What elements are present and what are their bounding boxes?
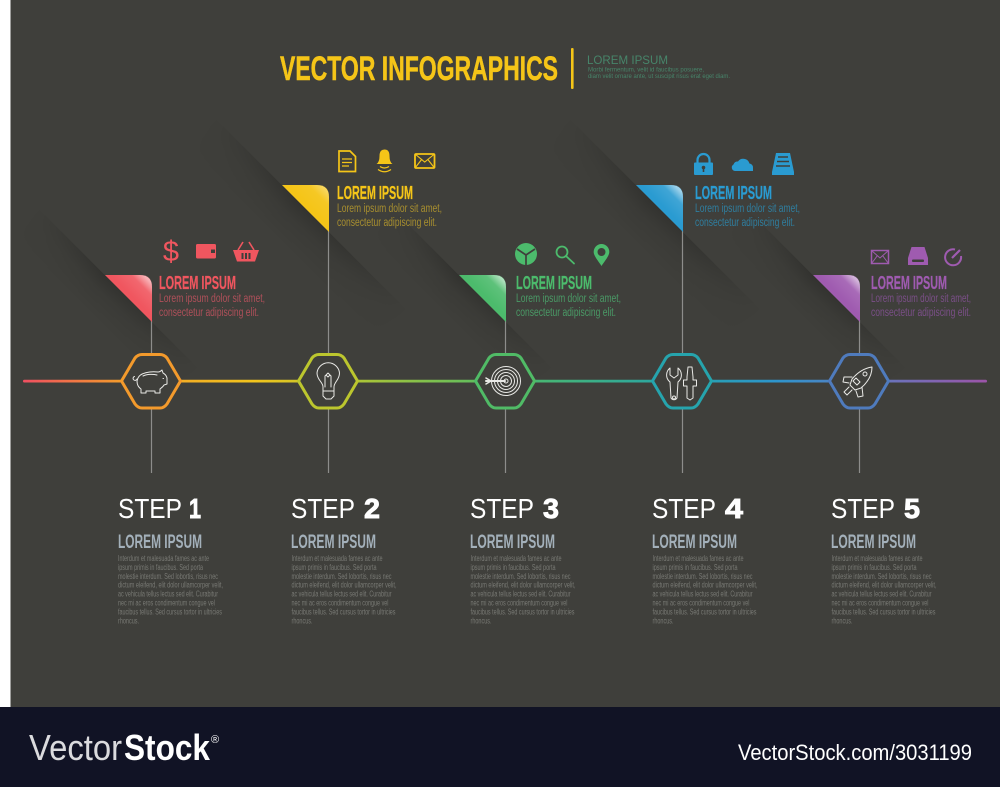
white left strip <box>0 0 10 707</box>
icon: envelope <box>872 250 888 264</box>
heading: LOREM IPSUM <box>516 273 592 293</box>
body paragraph: ac vehicula tellus lectus sed elit. Curabitur <box>292 590 392 598</box>
body paragraph <box>118 554 223 626</box>
body paragraph: molestie interdum. Sed lobortis, risus nec <box>118 572 218 581</box>
body paragraph: Interdum et malesuada fames ac ante <box>652 554 744 563</box>
step label: STEP <box>291 493 355 524</box>
body paragraph: nec mi ac eros condimentum congue vel <box>652 598 750 608</box>
icon: drive <box>908 247 928 265</box>
body paragraph <box>832 554 936 626</box>
icon: cube circle <box>515 243 537 265</box>
body paragraph: rhoncus. <box>118 616 139 626</box>
connector: step 5 <box>858 320 860 473</box>
step label: STEP <box>118 493 182 524</box>
heading: LOREM IPSUM <box>695 183 772 203</box>
panel: step 1 top <box>105 236 265 473</box>
body paragraph: Interdum et malesuada fames ac ante <box>118 554 209 563</box>
body paragraph: faucibus tellus. Sed cursus tortor in ultricies <box>832 608 936 616</box>
subtitle block <box>587 53 730 80</box>
step label: STEP <box>470 493 534 524</box>
subheading: LOREM IPSUM <box>652 531 737 553</box>
node: step 5 hexagon <box>830 354 888 408</box>
description <box>871 293 971 319</box>
subheading: LOREM IPSUM <box>831 531 916 553</box>
icon: cloud <box>732 159 753 171</box>
tab: purple <box>813 275 860 322</box>
body paragraph: ipsum primis in faucibus. Sed porta <box>652 563 738 572</box>
subheading: LOREM IPSUM <box>470 531 555 553</box>
connector: step 2 <box>328 230 330 473</box>
description <box>516 293 621 319</box>
body paragraph: faucibus tellus. Sed cursus tortor in ultricies <box>652 608 757 616</box>
step 2 text column <box>291 493 396 626</box>
body paragraph: dictum eleifend, elit dolor ullamcorper velit, <box>470 580 576 590</box>
description: consectetur adipiscing elit. <box>337 217 437 229</box>
body paragraph: ipsum primis in faucibus. Sed porta <box>292 563 377 572</box>
icon: map pin <box>594 244 609 266</box>
tab: yellow <box>282 185 329 232</box>
body paragraph <box>470 554 576 626</box>
body paragraph: molestie interdum. Sed lobortis, risus nec <box>470 572 571 581</box>
body paragraph: Interdum et malesuada fames ac ante <box>832 554 922 563</box>
body paragraph: ac vehicula tellus lectus sed elit. Curabitur <box>832 590 932 598</box>
body paragraph: ac vehicula tellus lectus sed elit. Curabitur <box>470 590 571 598</box>
body paragraph: Interdum et malesuada fames ac ante <box>292 554 382 563</box>
connector: step 4 <box>682 230 684 473</box>
icon: dollar: $ <box>163 236 179 268</box>
step label: 4 <box>725 493 743 524</box>
icon: magnifier <box>556 246 574 264</box>
step 3 text column <box>470 493 576 626</box>
description: consectetur adipiscing elit. <box>516 307 616 319</box>
title: VECTOR INFOGRAPHICS <box>280 50 558 88</box>
subheading: LOREM IPSUM <box>291 531 376 553</box>
heading: LOREM IPSUM <box>159 273 236 293</box>
icon: rocket <box>843 367 872 397</box>
heading: LOREM IPSUM <box>871 273 947 293</box>
description <box>337 203 442 229</box>
node: step 1 hexagon <box>122 354 180 408</box>
logo <box>29 727 219 768</box>
body paragraph: dictum eleifend, elit dolor ullamcorper velit, <box>292 580 396 590</box>
icon: wallet <box>196 244 216 258</box>
icon: padlock <box>694 154 713 175</box>
node: step 3 hexagon <box>476 354 534 408</box>
diagonal long shadows <box>82 171 862 324</box>
step 4 text column <box>652 493 758 626</box>
body paragraph: rhoncus. <box>292 616 312 626</box>
logo: Vector <box>29 727 122 768</box>
panel: step 2 top <box>282 150 442 473</box>
step 1 text column <box>118 493 223 626</box>
tab: blue <box>636 185 683 232</box>
icon: bell <box>376 150 392 172</box>
step label: 1 <box>189 493 201 524</box>
node: step 2 hexagon <box>298 354 358 408</box>
icon: envelope <box>415 154 434 168</box>
body paragraph: dictum eleifend, elit dolor ullamcorper velit, <box>652 580 758 590</box>
body paragraph: nec mi ac eros condimentum congue vel <box>832 598 929 608</box>
body paragraph: ipsum primis in faucibus. Sed porta <box>118 563 203 572</box>
panel: step 4 top <box>636 153 800 473</box>
body paragraph: dictum eleifend, elit dolor ullamcorper velit, <box>118 580 223 590</box>
icon: gauge <box>945 249 961 265</box>
description: consectetur adipiscing elit. <box>159 307 259 319</box>
body paragraph: molestie interdum. Sed lobortis, risus nec <box>832 572 932 581</box>
body paragraph: ac vehicula tellus lectus sed elit. Curabitur <box>652 590 753 598</box>
connector: step 3 <box>504 320 506 473</box>
body paragraph: ipsum primis in faucibus. Sed porta <box>832 563 917 572</box>
image id: VectorStock.com/3031199 <box>738 740 972 765</box>
logo: Stock <box>124 727 211 768</box>
body paragraph: nec mi ac eros condimentum congue vel <box>292 598 389 608</box>
icon: light bulb <box>317 363 340 399</box>
description: Lorem ipsum dolor sit amet, <box>516 293 621 305</box>
subtitle block: LOREM IPSUM <box>587 53 668 67</box>
body paragraph: molestie interdum. Sed lobortis, risus nec <box>652 572 753 581</box>
title divider <box>571 48 574 89</box>
icon: document <box>339 151 356 172</box>
tab: green <box>459 275 506 322</box>
step label: STEP <box>652 493 716 524</box>
description <box>695 203 800 229</box>
description: consectetur adipiscing elit. <box>695 217 795 229</box>
body paragraph: ac vehicula tellus lectus sed elit. Curabitur <box>118 590 218 598</box>
logo: ® <box>211 734 219 746</box>
step label: STEP <box>831 493 895 524</box>
subtitle block: Morbi fermentum, velit id faucibus posuere, <box>588 68 704 74</box>
panel: step 3 top <box>459 243 621 473</box>
connector: step 1 <box>150 320 152 473</box>
subheading: LOREM IPSUM <box>118 531 202 553</box>
body paragraph <box>652 554 758 626</box>
description: Lorem ipsum dolor sit amet, <box>159 293 265 305</box>
footer bar <box>0 707 1000 787</box>
tab: red <box>105 275 152 322</box>
body paragraph: faucibus tellus. Sed cursus tortor in ultricies <box>118 608 222 616</box>
body paragraph: molestie interdum. Sed lobortis, risus nec <box>292 572 392 581</box>
step 5 text column <box>831 493 936 626</box>
description: Lorem ipsum dolor sit amet, <box>337 203 442 215</box>
step label: 5 <box>904 493 920 524</box>
panel: step 5 top <box>813 247 971 473</box>
body paragraph: rhoncus. <box>832 616 852 626</box>
body paragraph: faucibus tellus. Sed cursus tortor in ultricies <box>470 608 575 616</box>
body paragraph: faucibus tellus. Sed cursus tortor in ultricies <box>292 608 396 616</box>
body paragraph: nec mi ac eros condimentum congue vel <box>118 598 215 608</box>
body paragraph: ipsum primis in faucibus. Sed porta <box>470 563 556 572</box>
timeline line <box>23 380 987 382</box>
body paragraph: Interdum et malesuada fames ac ante <box>470 554 562 563</box>
step label: 3 <box>543 493 559 524</box>
body paragraph: nec mi ac eros condimentum congue vel <box>470 598 568 608</box>
subtitle block: diam velit ornare ante, ut suscipit risus erat eget diam. <box>588 74 730 80</box>
icon: basket <box>233 242 259 262</box>
body paragraph: rhoncus. <box>652 616 674 626</box>
body paragraph <box>292 554 396 626</box>
body paragraph: rhoncus. <box>470 616 492 626</box>
icon: target with arrow <box>486 366 520 396</box>
description <box>159 293 265 319</box>
icon: tray <box>772 153 794 175</box>
body paragraph: dictum eleifend, elit dolor ullamcorper velit, <box>832 580 936 590</box>
heading: LOREM IPSUM <box>337 183 413 203</box>
icon: wrench and screwdriver <box>667 367 696 400</box>
node: step 4 hexagon <box>652 354 712 408</box>
description: Lorem ipsum dolor sit amet, <box>695 203 800 215</box>
icon: piggy bank <box>133 370 167 393</box>
step label: 2 <box>364 493 380 524</box>
